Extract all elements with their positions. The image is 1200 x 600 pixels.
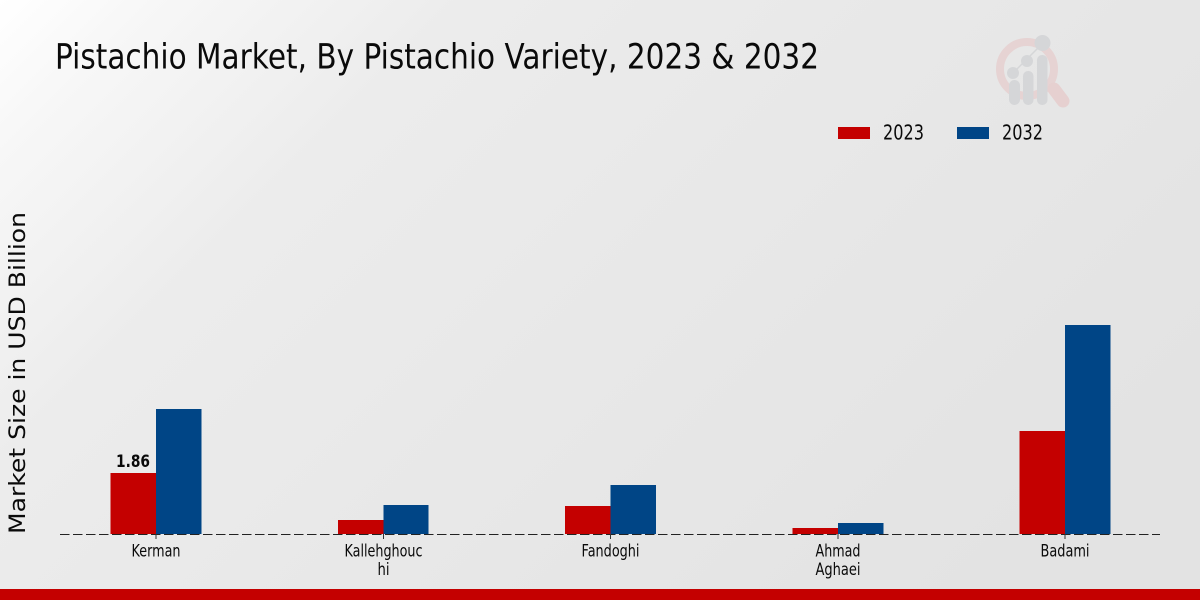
- label: Kerman: Kerman: [132, 542, 180, 560]
- y axis title: Market Size in USD Billion: [6, 212, 31, 534]
- bars: Fandoghi: [565, 485, 656, 534]
- bars: Badami: [1020, 325, 1110, 534]
- label: Ahmad Aghaei: [816, 542, 860, 579]
- legend item: 2023: [838, 120, 924, 144]
- bars: Kerman: [110, 409, 202, 534]
- x axis ticks: [156, 534, 1065, 539]
- legend item: 2032: 2032: [1002, 120, 1043, 144]
- label: Kallehghouchi: hi: [378, 560, 390, 579]
- label: Ahmad Aghaei: Aghaei: [816, 560, 860, 579]
- x axis baseline: [60, 534, 1160, 536]
- label: Fandoghi: Fandoghi: [582, 542, 640, 560]
- data label: 1.86: [116, 452, 150, 471]
- bars: Ahmad Aghaei: [792, 523, 884, 534]
- label: Kallehghouchi: Kallehghouc: [344, 542, 422, 560]
- legend item: 2023: 2023: [883, 120, 924, 144]
- label: Kallehghouchi: [344, 542, 422, 579]
- label: Ahmad Aghaei: Ahmad: [816, 542, 860, 560]
- legend item: 2032: [957, 120, 1043, 144]
- legend: [838, 120, 1043, 144]
- icon: magnifier logo: [1000, 35, 1063, 105]
- title: Pistachio Market, By Pistachio Variety, 2023 & 2032: [55, 38, 819, 78]
- x axis labels: [132, 542, 1090, 579]
- footer bar: [0, 589, 1200, 600]
- bar chart: [110, 325, 1110, 534]
- bars: Kallehghouchi: [338, 505, 428, 534]
- label: Badami: Badami: [1040, 542, 1090, 560]
